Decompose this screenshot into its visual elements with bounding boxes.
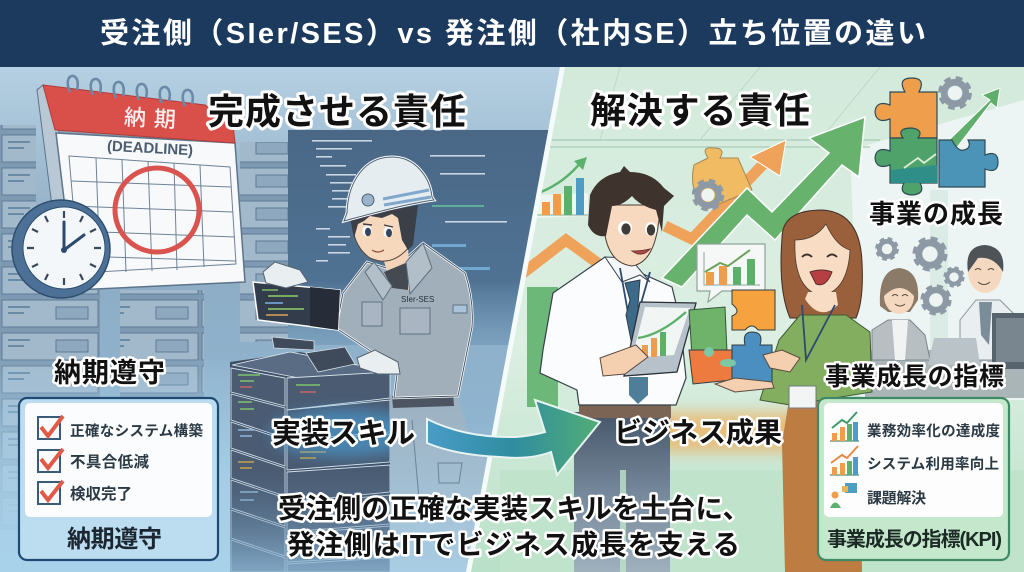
icon: puzzle group growth: [875, 78, 1000, 195]
icon: wall chart: [536, 157, 588, 218]
checklist item 2: [38, 449, 149, 472]
checklist item 3: [38, 481, 132, 504]
label: implementation skill: 実装スキル: [272, 417, 415, 450]
puzzle pieces held: [689, 290, 800, 392]
background gears: [878, 240, 962, 312]
panel: right side, client background: [460, 67, 1024, 572]
panel: deadline checklist: [19, 398, 218, 560]
background coworkers: [872, 245, 1024, 369]
man with tablet: [540, 166, 696, 572]
heading: deadline compliance: 納期遵守: [54, 358, 165, 388]
red circle on deadline date: [115, 168, 199, 252]
KPI item 2: システム利用率向上: [867, 455, 999, 473]
header bar: [0, 0, 1024, 67]
divider between the two sides: [466, 67, 565, 572]
title: 受注側（SIer/SES）vs 発注側（社内SE）立ち位置の違い: [100, 17, 926, 50]
icon: calendar with deadline: [37, 76, 245, 291]
heading: responsibility to solve: 解決する責任: [590, 90, 810, 131]
KPI item 1: [830, 412, 1000, 441]
conclusion text: [278, 493, 750, 560]
checklist item 3: 検収完了: [70, 484, 132, 503]
heading: KPI: 事業成長の指標: [825, 363, 1004, 391]
name badge text: SIer-SES: [401, 295, 434, 304]
icon: green growth arrow: [662, 117, 865, 287]
icon: orange growth arrow: [514, 140, 786, 280]
conclusion text: 発注側はITでビジネス成長を支える: [287, 529, 740, 560]
panel caption: 事業成長の指標(KPI): [827, 527, 1002, 551]
orange glow behind result: [670, 404, 788, 460]
checklist item 2: 不具合低減: [70, 453, 149, 471]
server stack: [230, 352, 390, 572]
icon: orange puzzle and gear: [692, 148, 752, 210]
KPI item 2: [830, 446, 999, 475]
KPI item 3: [830, 483, 926, 508]
label: business growth: 事業の成長: [869, 199, 1003, 229]
calendar heading: 納期: [123, 105, 177, 132]
KPI item 1: 業務効率化の達成度: [867, 422, 1000, 440]
checklist item 1: [38, 416, 204, 440]
speech bubble with chart: [697, 244, 765, 302]
deadline label: (DEADLINE): [107, 138, 193, 159]
panel caption: 納期遵守: [67, 526, 162, 553]
KPI item 3: 課題解決: [867, 489, 926, 507]
checklist item 1: 正確なシステム構築: [70, 422, 204, 440]
icon: wall clock: [12, 200, 110, 298]
green bar: [527, 287, 558, 407]
label: business results: ビジネス成果: [614, 417, 782, 448]
worker character: [253, 157, 500, 572]
woman with puzzle: [760, 210, 872, 572]
arrow: skills to business results: [427, 400, 600, 475]
heading: responsibility to complete: 完成させる責任: [208, 91, 466, 132]
conclusion text: 受注側の正確な実装スキルを土台に、: [278, 493, 750, 524]
code screen: [288, 130, 568, 345]
panel: KPI list: [818, 398, 1009, 560]
panel: left side, contractor background: [0, 67, 570, 572]
